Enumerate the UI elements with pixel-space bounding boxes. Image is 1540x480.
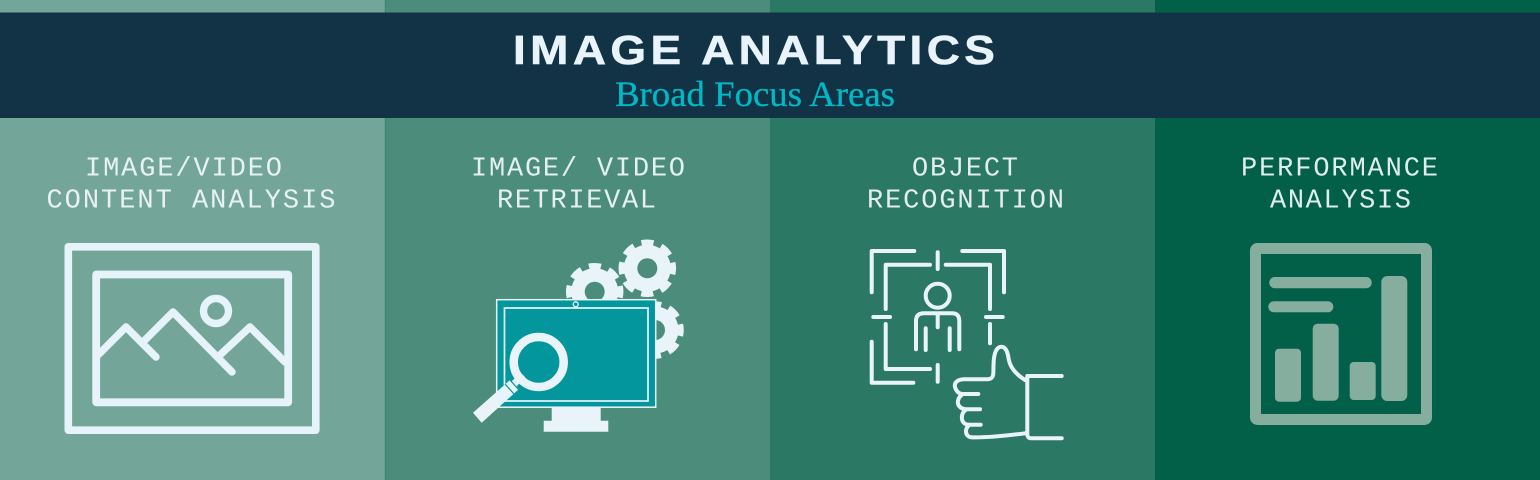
panel heading: image/video retrieval: RETRIEVAL bbox=[497, 186, 656, 216]
icon part: magnifier bbox=[473, 337, 564, 423]
panel heading: image/video retrieval bbox=[471, 154, 685, 216]
title band bbox=[0, 12, 1540, 118]
panel heading: image/video content analysis bbox=[46, 154, 336, 216]
panel heading: image/video content analysis: IMAGE/VIDEO bbox=[85, 154, 282, 184]
title: IMAGE ANALYTICS bbox=[513, 28, 999, 73]
icon: framed landscape picture bbox=[68, 247, 316, 430]
icon part: thumbs up hand bbox=[955, 347, 1062, 438]
panel: performance analysis bbox=[1155, 0, 1540, 480]
panel heading: performance analysis: ANALYSIS bbox=[1270, 186, 1411, 216]
panel heading: image/video content analysis: CONTENT ANALYSIS bbox=[46, 186, 336, 216]
icon: bar chart report bbox=[1256, 248, 1426, 420]
panel heading: performance analysis bbox=[1241, 154, 1438, 216]
panel heading: performance analysis: PERFORMANCE bbox=[1241, 154, 1438, 184]
icon: monitor with gears and magnifier bbox=[473, 243, 680, 432]
panel heading: object recognition: RECOGNITION bbox=[867, 186, 1064, 216]
icon part: gears bbox=[569, 243, 680, 356]
panel heading: image/video retrieval: IMAGE/ VIDEO bbox=[471, 154, 685, 184]
icon part: target brackets bbox=[872, 251, 1004, 383]
icon: person target with thumbs up bbox=[872, 251, 1062, 438]
icon part: person bbox=[916, 284, 959, 350]
panel: object recognition bbox=[770, 0, 1155, 480]
panel: image/video retrieval bbox=[385, 0, 770, 480]
subtitle: Broad Focus Areas bbox=[615, 74, 895, 114]
icon part: monitor bbox=[497, 300, 656, 432]
panel heading: object recognition: OBJECT bbox=[912, 154, 1018, 184]
panel heading: object recognition bbox=[867, 154, 1064, 216]
panel: image/video content analysis bbox=[0, 0, 385, 480]
